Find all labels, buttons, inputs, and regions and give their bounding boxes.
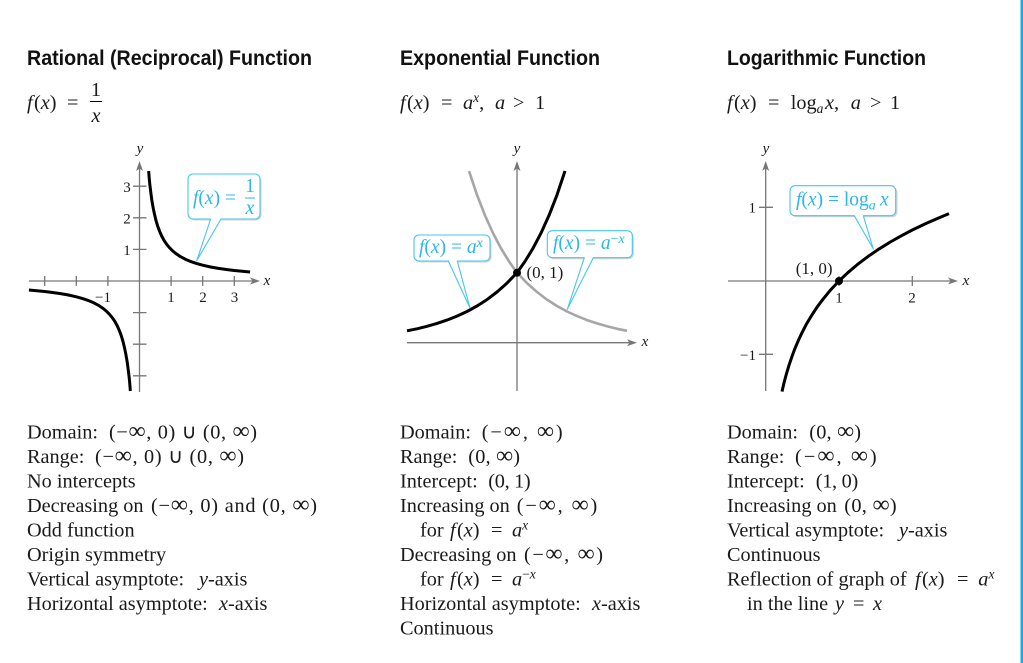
formula: f(x) = a^x: a: [495, 92, 505, 114]
properties list: exponential: =: [491, 568, 502, 590]
properties list: exponential: (: [457, 520, 464, 542]
graph: reciprocal curve: [29, 141, 271, 392]
formula: f(x) = a^x: =: [441, 92, 452, 114]
properties list: exponential: Decreasing on: [400, 544, 517, 566]
properties list: rational: Horizontal asymptote:: [27, 593, 208, 615]
graph: reciprocal curve: 3: [123, 180, 131, 196]
formula: f(x) = 1/x: [27, 79, 102, 127]
graph: reciprocal curve: 2: [199, 290, 207, 306]
graph: reciprocal curve: 1: [167, 290, 175, 306]
graph: logarithmic curve: [728, 141, 970, 392]
properties list: rational: Domain:: [27, 422, 98, 444]
properties list: logarithmic: Domain:: [727, 422, 798, 444]
properties list: rational: y: [197, 568, 209, 590]
formula: f(x) = log_a x: 1: [890, 92, 900, 114]
properties list: logarithmic: [727, 418, 994, 615]
callout: f(x) = log_a x: [790, 186, 898, 249]
properties list: logarithmic: Intercept:: [727, 470, 805, 492]
properties list: exponential: x): [464, 568, 480, 590]
heading: rational function: Rational (Reciprocal) Function: [27, 47, 312, 70]
graph: logarithmic curve: x: [962, 273, 970, 289]
panel: rational function: [27, 47, 317, 615]
properties list: rational: Range:: [27, 446, 84, 468]
formula: f(x) = 1/x: 1: [91, 79, 101, 101]
callout: f(x) = a^-x: f(x) = a: [553, 233, 611, 254]
callout: f(x) = log_a x: x: [879, 190, 889, 211]
properties list: exponential: for: [420, 520, 444, 542]
properties list: rational: x: [218, 593, 228, 615]
properties list: exponential: Range:: [400, 446, 457, 468]
graph: logarithmic curve: 1: [749, 201, 756, 217]
properties list: rational: No intercepts: [27, 470, 136, 492]
formula: f(x) = 1/x: =: [67, 92, 78, 114]
properties list: logarithmic: =: [853, 593, 864, 615]
properties list: logarithmic: =: [957, 568, 968, 590]
graph: reciprocal curve: 1: [123, 243, 131, 259]
properties list: rational: [27, 418, 317, 615]
properties list: exponential: (−∞, ∞): [524, 541, 603, 567]
properties list: exponential: −: [522, 566, 530, 582]
callout: f(x) = 1/x: [188, 174, 262, 261]
formula: f(x) = 1/x: f: [27, 92, 35, 114]
formula: f(x) = log_a x: (: [734, 92, 741, 114]
formula: f(x) = a^x: x): [414, 92, 430, 114]
properties list: rational: -axis: [208, 568, 247, 590]
properties list: exponential: (−∞, ∞): [482, 418, 563, 444]
heading: logarithmic function: Logarithmic Function: [727, 47, 926, 70]
heading: exponential function: Exponential Function: [400, 47, 600, 70]
properties list: logarithmic: Reflection of graph of: [727, 568, 907, 590]
properties list: logarithmic: f: [915, 568, 923, 590]
properties list: rational: -axis: [228, 593, 267, 615]
graph: logarithmic curve: 2: [908, 291, 916, 307]
formula: f(x) = log_a x: a: [851, 92, 861, 114]
properties list: exponential: for: [420, 568, 444, 590]
properties list: exponential: a: [512, 520, 522, 542]
properties list: logarithmic: -axis: [908, 520, 947, 542]
properties list: exponential: Horizontal asymptote:: [400, 593, 581, 615]
properties list: logarithmic: Range:: [727, 446, 784, 468]
formula: f(x) = a^x: 1: [535, 92, 545, 114]
callout: f(x) = a^x: x: [476, 236, 484, 251]
properties list: logarithmic: Vertical asymptote:: [727, 520, 884, 542]
formula: f(x) = 1/x: x: [90, 105, 101, 127]
callout: f(x) = 1/x: f(x) =: [193, 188, 236, 209]
formula: f(x) = a^x: x: [472, 90, 479, 105]
properties list: exponential: (0, 1): [488, 470, 531, 492]
properties list: rational: (−∞, 0) and (0, ∞): [151, 492, 317, 518]
properties list: exponential: Continuous: [400, 618, 494, 640]
properties list: logarithmic: (0, ∞): [844, 492, 897, 518]
callout: f(x) = 1/x: 1: [245, 176, 255, 197]
graph: logarithmic curve: −1: [740, 348, 756, 364]
graph: logarithmic curve: y: [761, 141, 770, 157]
graph: exponential curves: [407, 141, 649, 391]
properties list: exponential: x): [464, 520, 480, 542]
graph: reciprocal curve: 2: [123, 212, 131, 228]
callout: f(x) = a^x: f(x) = a: [419, 237, 477, 258]
formula: f(x) = 1/x: x): [41, 92, 57, 114]
formula: f(x) = log_a x: a: [817, 101, 824, 116]
graph: logarithmic curve: 1: [835, 291, 843, 307]
properties list: exponential: x: [529, 566, 536, 582]
formula: f(x) = log_a x: x: [824, 92, 834, 114]
properties list: logarithmic: x: [987, 566, 994, 582]
properties list: rational: Decreasing on: [27, 495, 144, 517]
formula: f(x) = a^x: ,: [479, 92, 484, 114]
right edge bar: [1020, 0, 1023, 663]
point (0, 1): [513, 269, 521, 277]
properties list: logarithmic: in the line: [747, 593, 828, 615]
formula: f(x) = a^x: f: [400, 92, 408, 114]
properties list: logarithmic: a: [978, 568, 988, 590]
properties list: logarithmic: y: [833, 593, 845, 615]
graph: exponential curves: x: [641, 334, 649, 350]
formula: f(x) = log_a x: >: [870, 92, 881, 114]
properties list: exponential: x: [591, 593, 601, 615]
properties list: logarithmic: (0, ∞): [809, 418, 861, 444]
formula: f(x) = log_a x: x): [741, 92, 757, 114]
properties list: exponential: a: [512, 568, 522, 590]
formula: f(x) = 1/x: (: [34, 92, 41, 114]
callout: f(x) = a^-x: [547, 231, 634, 309]
graph: exponential curves: (0, 1): [526, 263, 563, 282]
callout: f(x) = 1/x: x: [245, 198, 255, 219]
point (1, 0): [835, 277, 843, 285]
panel: exponential function: [400, 47, 649, 640]
properties list: exponential: Intercept:: [400, 470, 478, 492]
properties list: exponential: [400, 418, 641, 640]
panel: logarithmic function: [727, 47, 994, 615]
properties list: rational: Origin symmetry: [27, 544, 167, 566]
callout: f(x) = a^-x: −: [611, 232, 619, 247]
callout: f(x) = log_a x: a: [869, 199, 876, 214]
properties list: logarithmic: x): [929, 568, 945, 590]
properties list: logarithmic: (1, 0): [816, 470, 858, 492]
graph: reciprocal curve: y: [135, 141, 144, 157]
properties list: rational: (−∞, 0) ∪ (0, ∞): [95, 443, 244, 469]
properties list: logarithmic: (: [922, 568, 929, 590]
formula: f(x) = a^x: a: [463, 92, 473, 114]
properties list: logarithmic: Continuous: [727, 544, 821, 566]
properties list: logarithmic: (−∞, ∞): [795, 443, 877, 469]
properties list: exponential: f: [450, 568, 458, 590]
properties list: exponential: Domain:: [400, 422, 471, 444]
properties list: exponential: (0, ∞): [468, 443, 520, 469]
properties list: exponential: =: [491, 520, 502, 542]
graph: reciprocal curve: −1: [95, 290, 111, 306]
formula: f(x) = log_a x: =: [768, 92, 779, 114]
properties list: exponential: (: [457, 568, 464, 590]
properties list: logarithmic: Increasing on: [727, 495, 837, 517]
properties list: exponential: x: [521, 518, 528, 532]
properties list: rational: Vertical asymptote:: [27, 568, 184, 590]
properties list: rational: Odd function: [27, 520, 135, 542]
properties list: exponential: (−∞, ∞): [517, 492, 597, 518]
graph: reciprocal curve: 3: [231, 290, 238, 306]
graph: logarithmic curve: (1, 0): [796, 259, 833, 278]
formula: f(x) = log_a x: f: [727, 92, 735, 114]
callout: f(x) = log_a x: f(x) = log: [796, 190, 869, 211]
formula: f(x) = log_a x: ,: [834, 92, 839, 114]
callout: f(x) = a^-x: x: [617, 232, 625, 247]
properties list: exponential: Increasing on: [400, 495, 510, 517]
callout: f(x) = a^x: [414, 235, 492, 308]
properties list: logarithmic: y: [897, 520, 909, 542]
formula: f(x) = log_a x: log: [791, 92, 817, 114]
graph: reciprocal curve: x: [263, 273, 271, 289]
properties list: exponential: -axis: [601, 593, 640, 615]
formula: f(x) = a^x: >: [513, 92, 524, 114]
properties list: exponential: f: [450, 520, 458, 542]
formula: f(x) = a^x: (: [407, 92, 414, 114]
properties list: logarithmic: x: [872, 593, 882, 615]
properties list: rational: (−∞, 0) ∪ (0, ∞): [109, 418, 257, 444]
graph: exponential curves: y: [512, 141, 521, 157]
